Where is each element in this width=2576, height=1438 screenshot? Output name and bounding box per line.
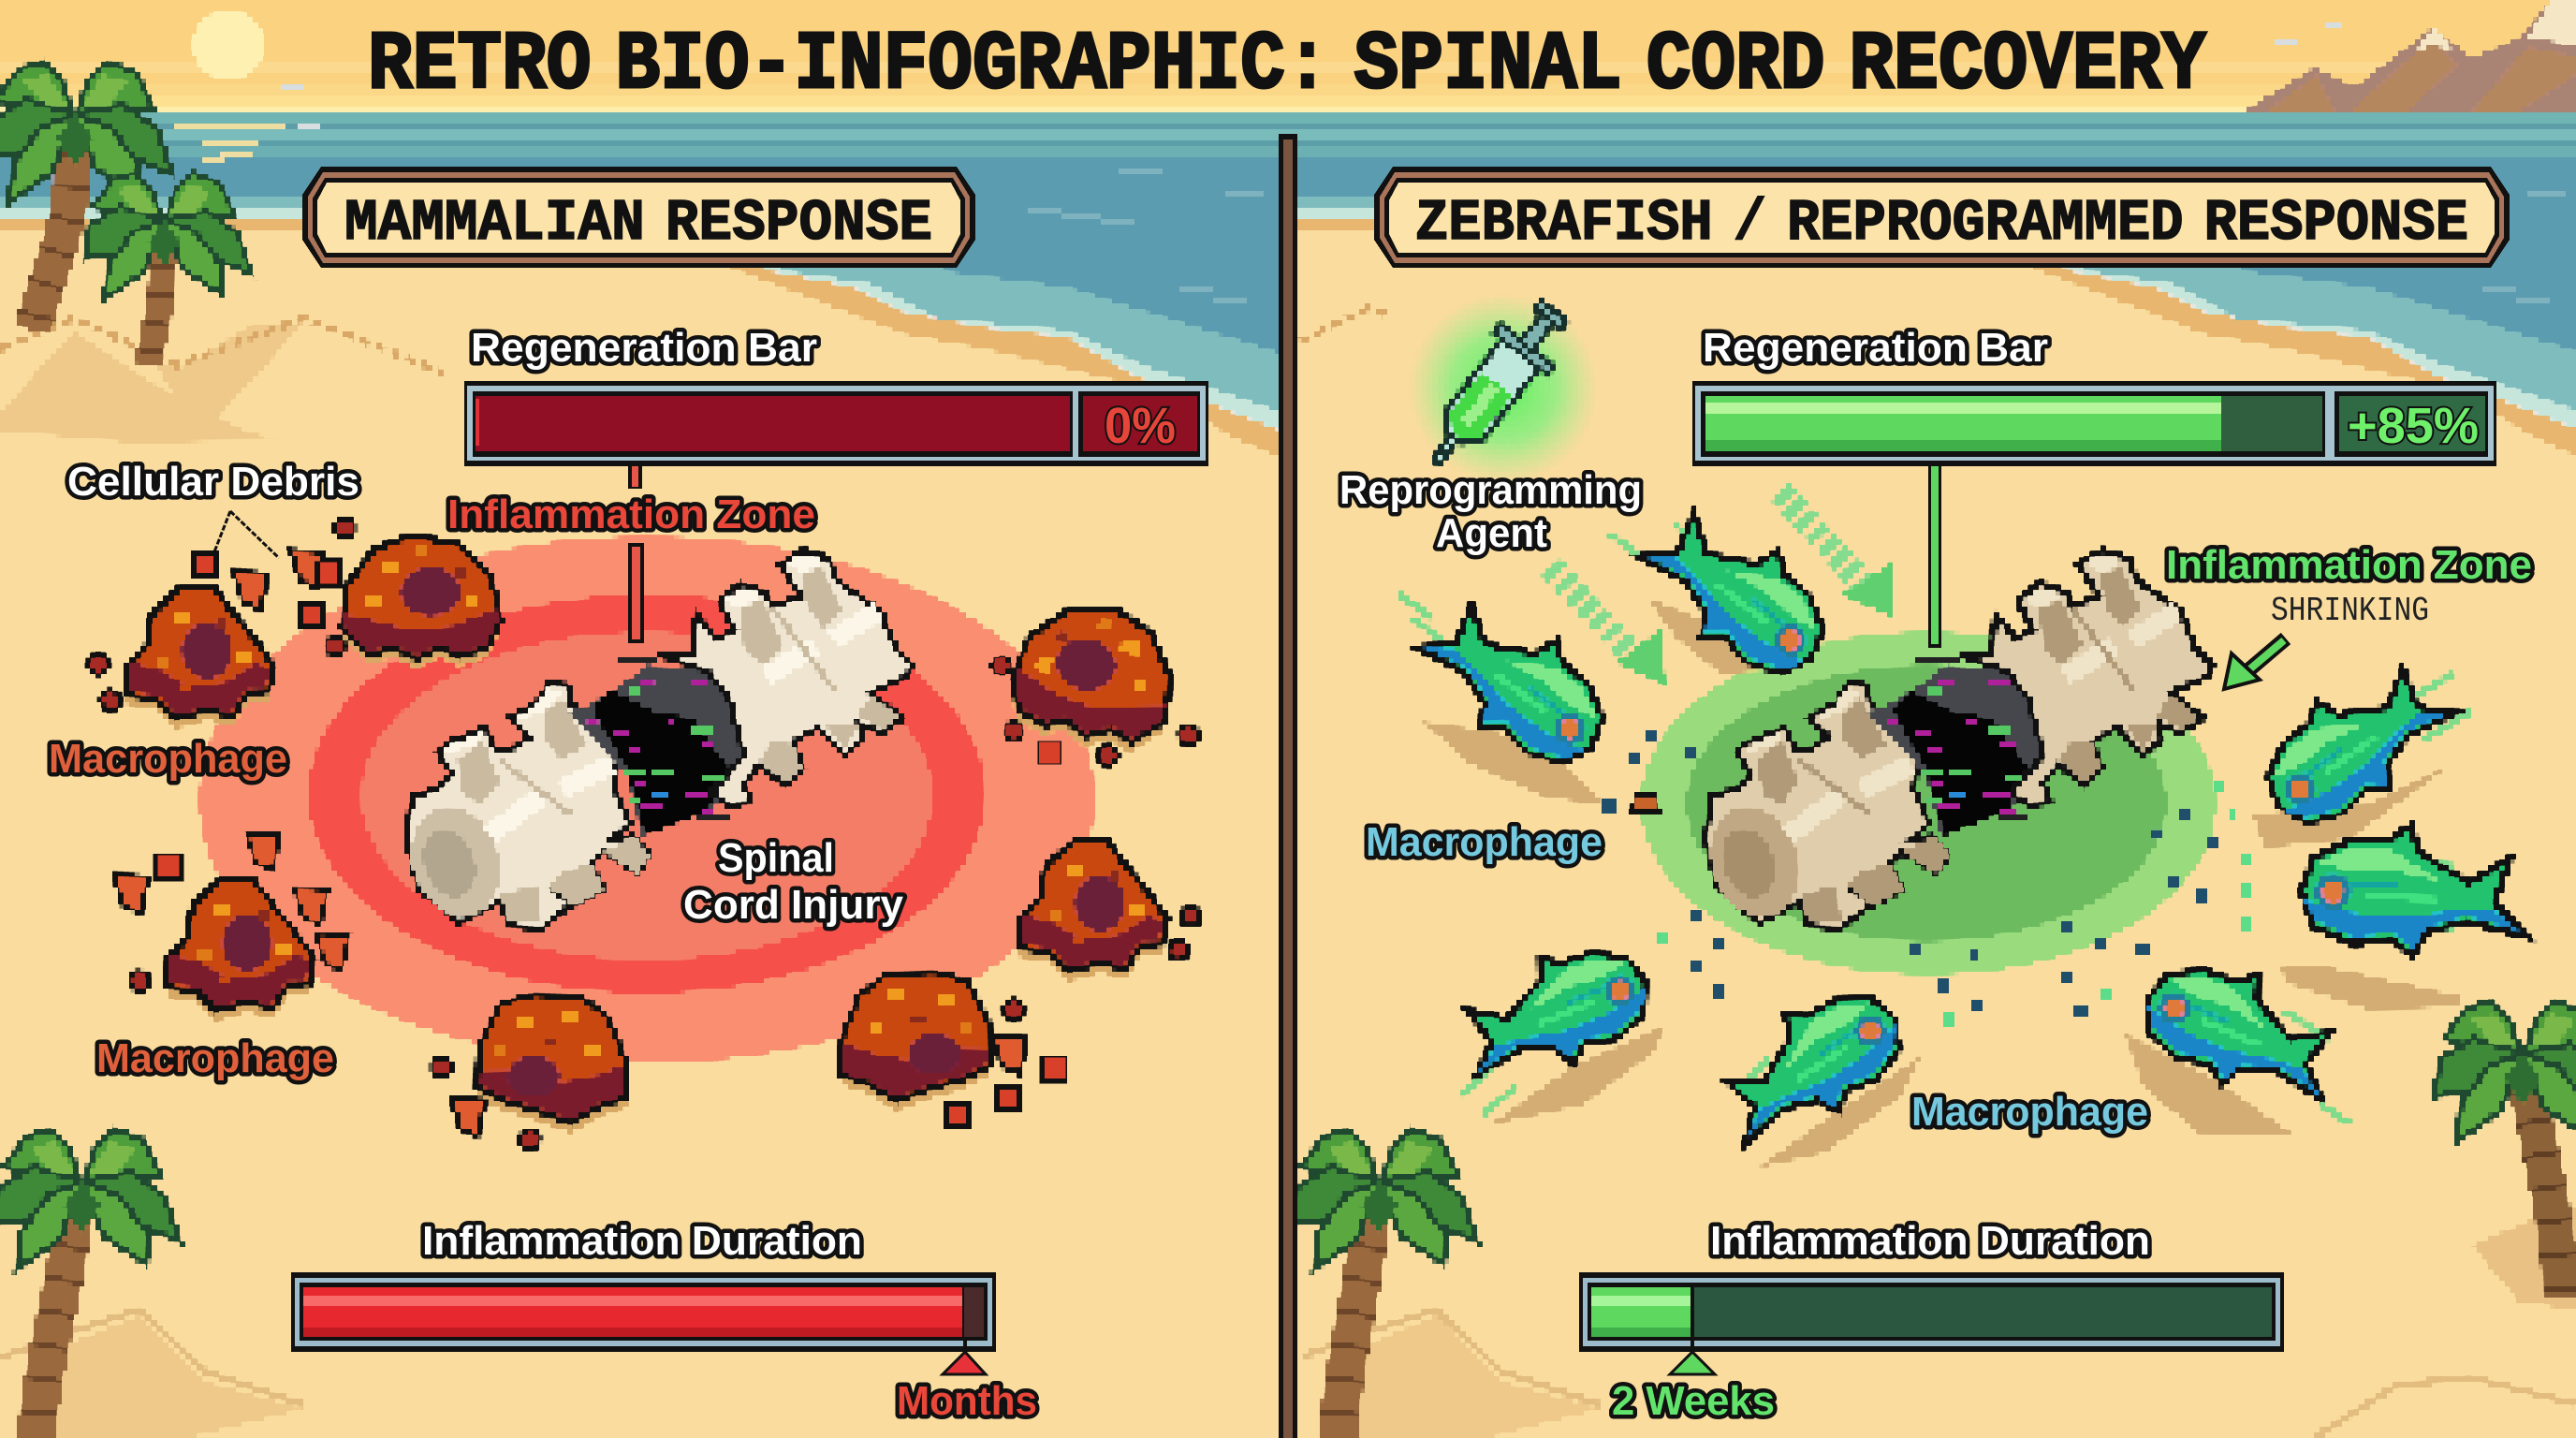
- duration marker: [943, 1337, 986, 1374]
- debris pointers: [213, 511, 279, 558]
- cellular debris label: Cellular Debris: [67, 459, 359, 505]
- arrow: agent to zone 2: [1780, 492, 1894, 617]
- shrinking caption: SHRINKING: [2271, 592, 2429, 630]
- panel: mammalian response: [49, 167, 1208, 1424]
- connector: bar to zone: [1928, 466, 1941, 648]
- birds: [281, 22, 2342, 131]
- heading banner: zebrafish: ZEBRAFISH / REPROGRAMMED RESPONSE: [1415, 190, 2468, 257]
- palm: top left small: [84, 173, 252, 365]
- inflammation duration label: Inflammation Duration: [1710, 1218, 2150, 1264]
- heading banner: mammalian: [302, 167, 975, 268]
- sun reflection: [172, 124, 284, 162]
- macrophage label 1: Macrophage: [49, 736, 287, 782]
- inflammation zone label: Inflammation Zone: [447, 492, 815, 537]
- syringe glow: [1410, 295, 1597, 482]
- heading banner: zebrafish: [1374, 167, 2510, 268]
- macrophage label 2: Macrophage: [96, 1035, 334, 1081]
- reprogramming agent label: [1339, 467, 1642, 556]
- inflammation zone rings: [199, 536, 1094, 1063]
- dunes: left top: [0, 318, 444, 443]
- scene art: shrinking zone, spine, fish: [1399, 290, 2532, 1167]
- spine with injury: [396, 550, 913, 929]
- connector: bar to inflammation zone: [628, 466, 644, 643]
- dunes: left bottom: [0, 1310, 304, 1438]
- macrophage cluster: [126, 536, 1185, 1133]
- icon: reprogramming agent syringe: [1410, 290, 1581, 482]
- heading banner: mammalian: MAMMALIAN RESPONSE: [344, 190, 932, 257]
- reprogrammed macrophage fish: [1402, 486, 2532, 1163]
- arrow: agent to zone 1: [1551, 567, 1665, 684]
- regeneration bar label: Regeneration Bar: [1703, 325, 2048, 371]
- palm: bottom left: [0, 1129, 180, 1438]
- sea and shore: left: [0, 112, 1288, 462]
- debris bits: [1603, 729, 2249, 1025]
- regeneration bar: +85%: +85%: [2348, 398, 2479, 454]
- inflammation zone label: Inflammation Zone: [2166, 542, 2532, 588]
- reprogramming agent label: Reprogramming: [1339, 467, 1642, 513]
- scene art: inflammation, spine, macrophages: [89, 519, 1200, 1149]
- macrophage label 1: Macrophage: [1366, 819, 1603, 865]
- spinal cord injury label: Cord Injury: [683, 882, 904, 928]
- reprogramming agent label: Agent: [1436, 510, 1547, 556]
- title: RETRO BIO-INFOGRAPHIC: SPINAL CORD RECOVERY: [368, 20, 2206, 112]
- spinal cord injury label: [683, 835, 904, 928]
- arrow: shrinking: [2224, 638, 2286, 689]
- cellular debris: [89, 519, 1200, 1149]
- regeneration bar: +85%: [1692, 381, 2496, 466]
- regeneration bar: 0%: [464, 381, 1208, 466]
- mountains: [2241, 0, 2576, 112]
- spinal cord injury label: Spinal: [718, 835, 834, 881]
- inflammation duration label: Inflammation Duration: [422, 1218, 862, 1264]
- sea and shore: right: [1282, 112, 2576, 462]
- palm: top left large: [0, 62, 172, 330]
- shrinking inflammation zone: [1641, 632, 2216, 975]
- inflammation duration bar: [1579, 1272, 2284, 1352]
- spine with healing injury: [1695, 550, 2212, 929]
- palm: right edge: [2435, 1001, 2576, 1298]
- dunes: right: [1300, 307, 2576, 1438]
- horizon water bands: [0, 112, 2576, 157]
- macrophage label 2: Macrophage: [1911, 1089, 2148, 1135]
- palm: right panel bottom left: [1292, 1129, 1477, 1438]
- sky: [0, 0, 2576, 112]
- sun: [193, 10, 264, 80]
- motion lines: [1399, 524, 2471, 1123]
- panel: zebrafish / reprogrammed response: [1339, 167, 2532, 1424]
- duration marker: [1670, 1337, 1715, 1374]
- regeneration bar: 0%: 0%: [1105, 398, 1176, 454]
- inflammation duration bar: [291, 1272, 996, 1352]
- regeneration bar label: Regeneration Bar: [471, 325, 817, 371]
- fish shadows: [1424, 599, 2462, 1167]
- months label: Months: [897, 1378, 1037, 1424]
- 2 weeks label: 2 Weeks: [1612, 1378, 1775, 1424]
- divider between panels: [1279, 134, 1297, 1438]
